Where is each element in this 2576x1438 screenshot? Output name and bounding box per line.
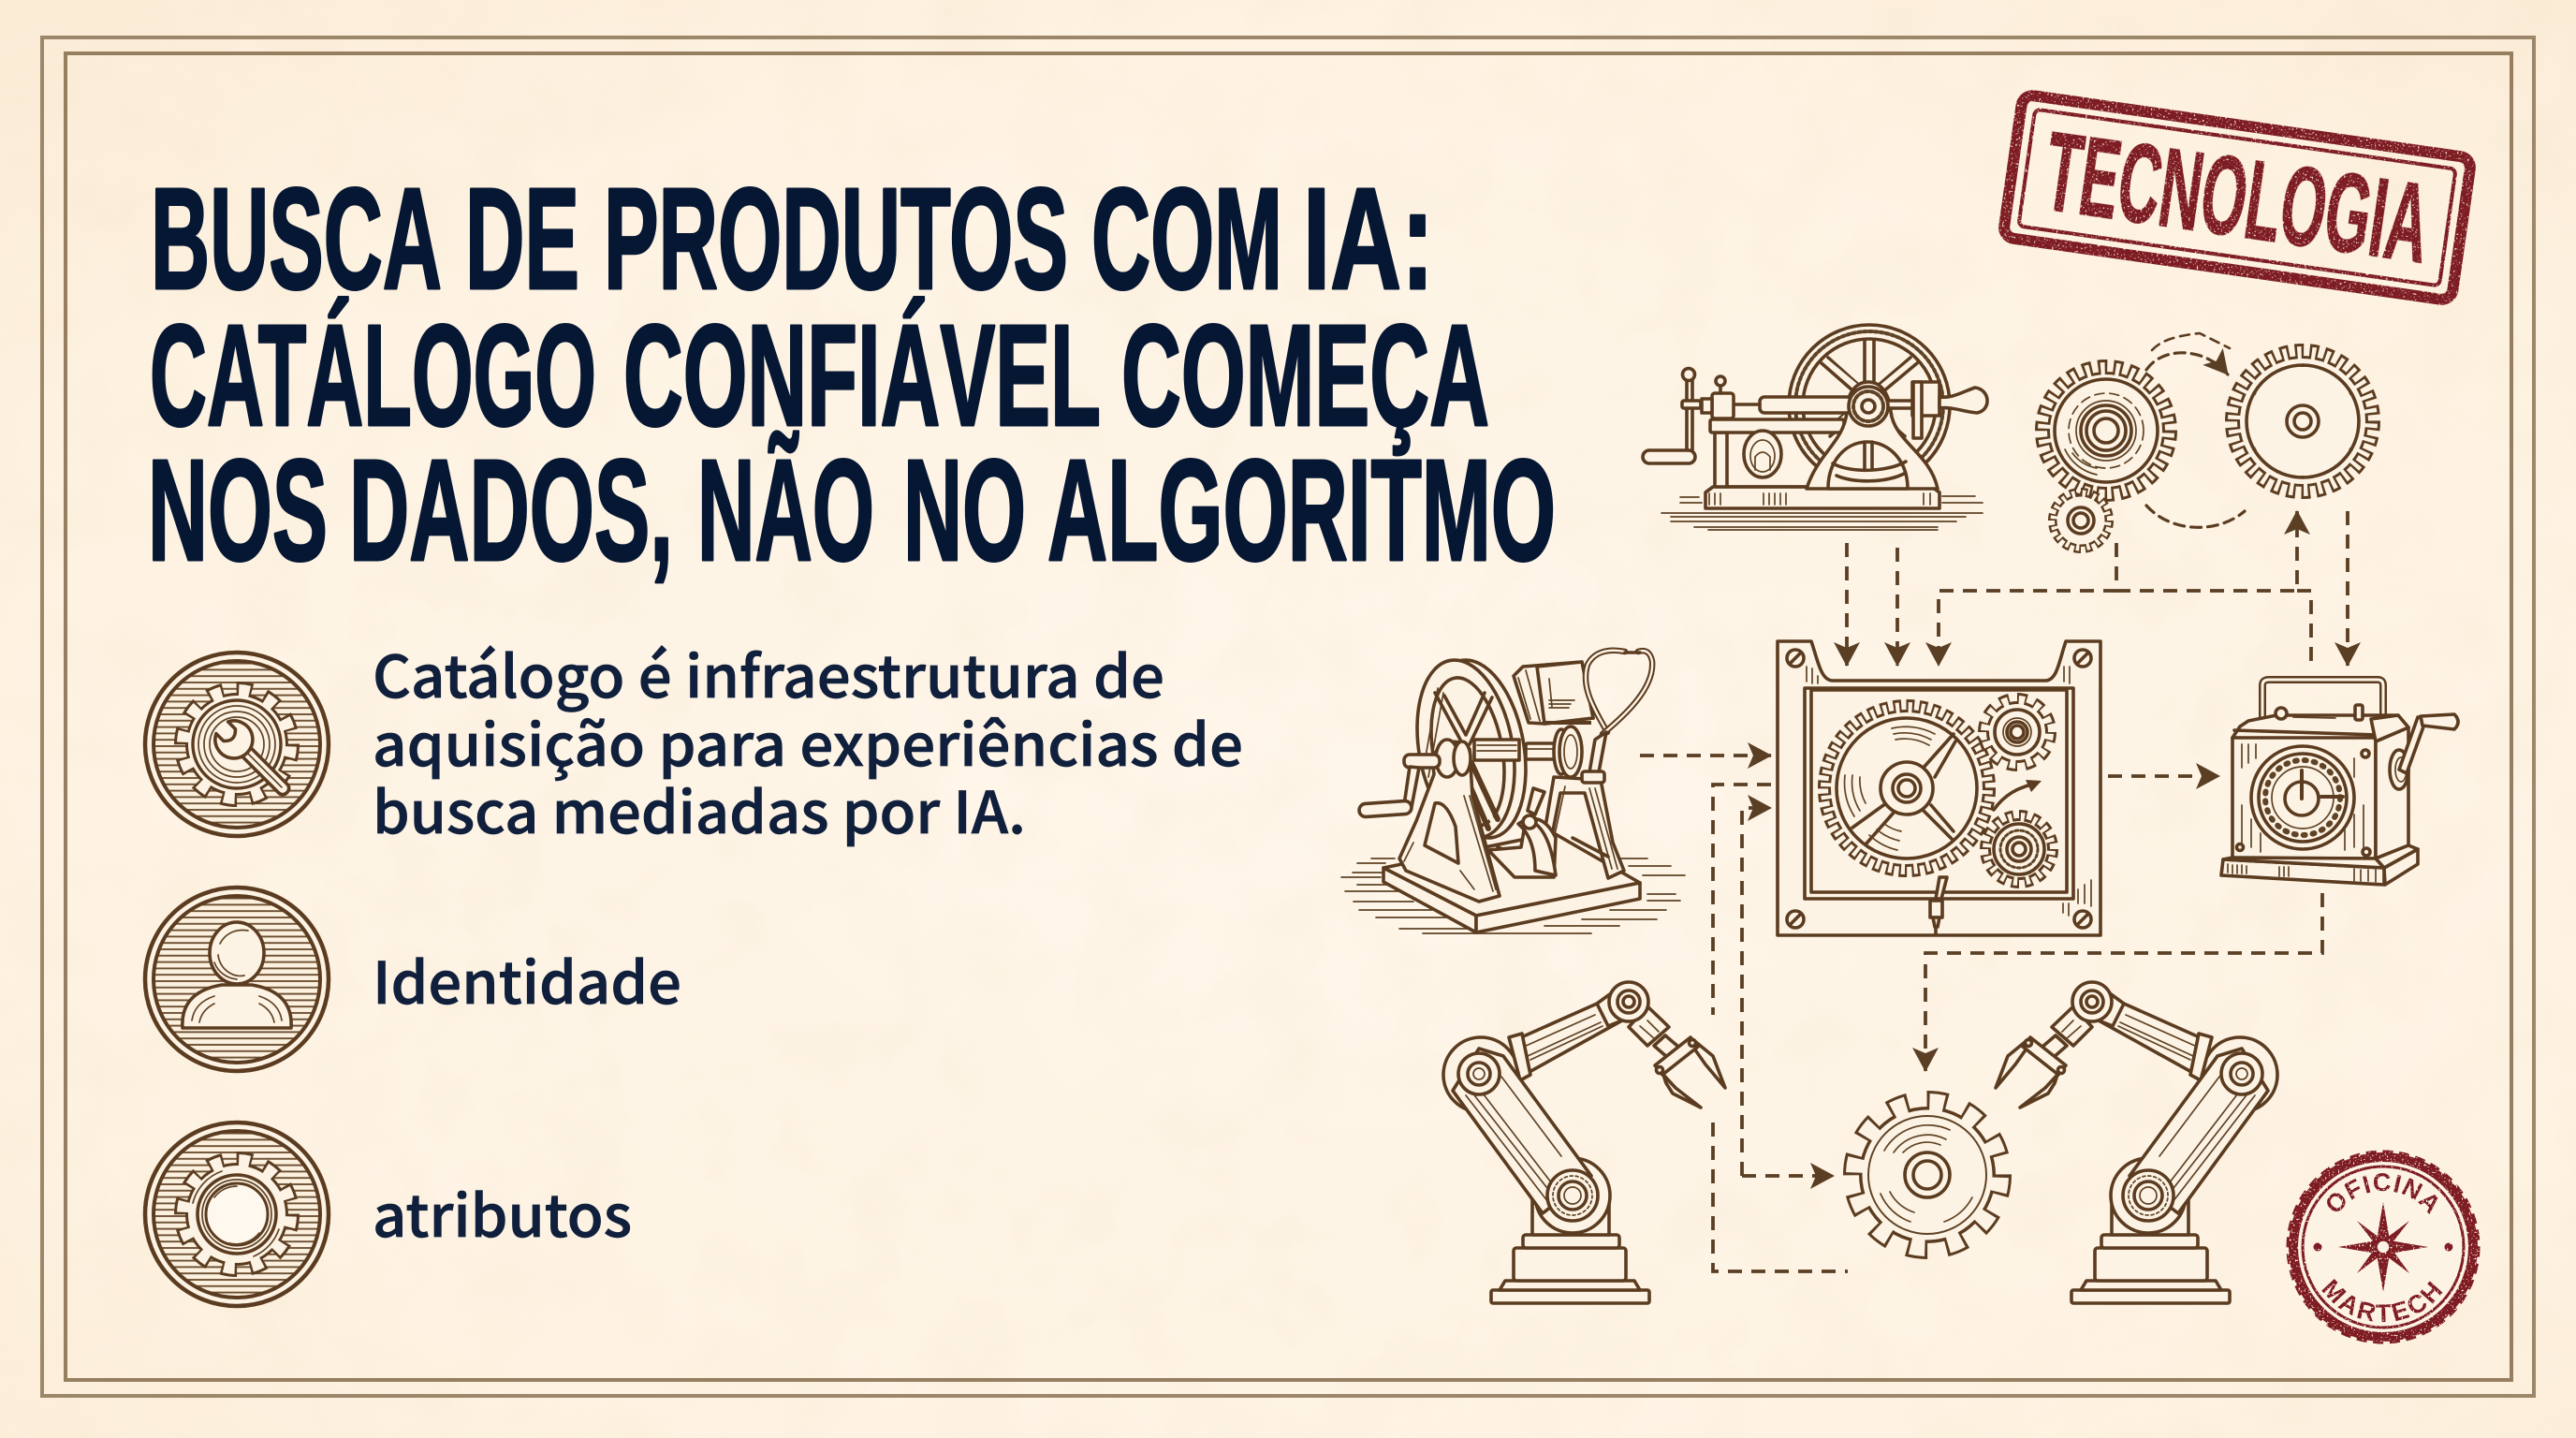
text: atributos: atributos bbox=[373, 1169, 632, 1254]
machine: lathe with wheel bbox=[1643, 325, 1987, 530]
title: COM bbox=[1091, 158, 1282, 319]
text: identidade: Identidade bbox=[373, 936, 681, 1020]
robot arm: left bbox=[1443, 982, 1725, 1303]
title: ALGORITMO bbox=[1047, 430, 1556, 591]
title: DE bbox=[465, 158, 579, 319]
title: NO bbox=[903, 430, 1026, 591]
gear: small solid bbox=[2052, 492, 2110, 550]
text: catalog statement: busca mediadas por IA. bbox=[373, 766, 1026, 850]
title: IA: bbox=[1303, 158, 1434, 319]
seal: Oficina Martech: MARTECH bbox=[2321, 1279, 2443, 1322]
icon: gear medallion bbox=[145, 1123, 329, 1306]
title: PRODUTOS bbox=[604, 158, 1068, 319]
title: CATÁLOGO bbox=[150, 295, 596, 456]
title: BUSCA bbox=[151, 158, 442, 319]
title: COMEÇA bbox=[1121, 295, 1489, 456]
text: catalog statement: aquisição para experiências de bbox=[373, 698, 1243, 783]
seal: Oficina Martech bbox=[2286, 1150, 2481, 1344]
text: catalog statement: Catálogo é infraestrutura de bbox=[373, 630, 1164, 714]
text: catalog statement bbox=[373, 630, 1243, 850]
panel: central gear mechanism bbox=[1778, 641, 2100, 935]
title: NÃO bbox=[697, 430, 874, 591]
machine: dial timer box bbox=[2221, 680, 2458, 885]
gear: large solid bbox=[2042, 366, 2171, 495]
arrows: dashed flow connectors bbox=[1640, 511, 2348, 1271]
robot arm: right bbox=[1996, 982, 2277, 1303]
title: NOS bbox=[148, 430, 328, 591]
seal: Oficina Martech: OFICINA bbox=[2327, 1173, 2437, 1214]
title bbox=[148, 158, 1556, 591]
gear: large bottom cog bbox=[1852, 1099, 2003, 1251]
arrows: gear rotation arcs bbox=[2146, 333, 2245, 527]
title: CONFIÁVEL bbox=[623, 295, 1101, 456]
icon: person medallion bbox=[145, 888, 329, 1071]
icon: gear and wrench medallion bbox=[145, 653, 329, 836]
machine: flywheel generator bbox=[1341, 651, 1685, 933]
stamp: TECNOLOGIA bbox=[2003, 95, 2471, 301]
title: DADOS, bbox=[349, 430, 673, 591]
gear: spoked bbox=[2232, 350, 2374, 492]
